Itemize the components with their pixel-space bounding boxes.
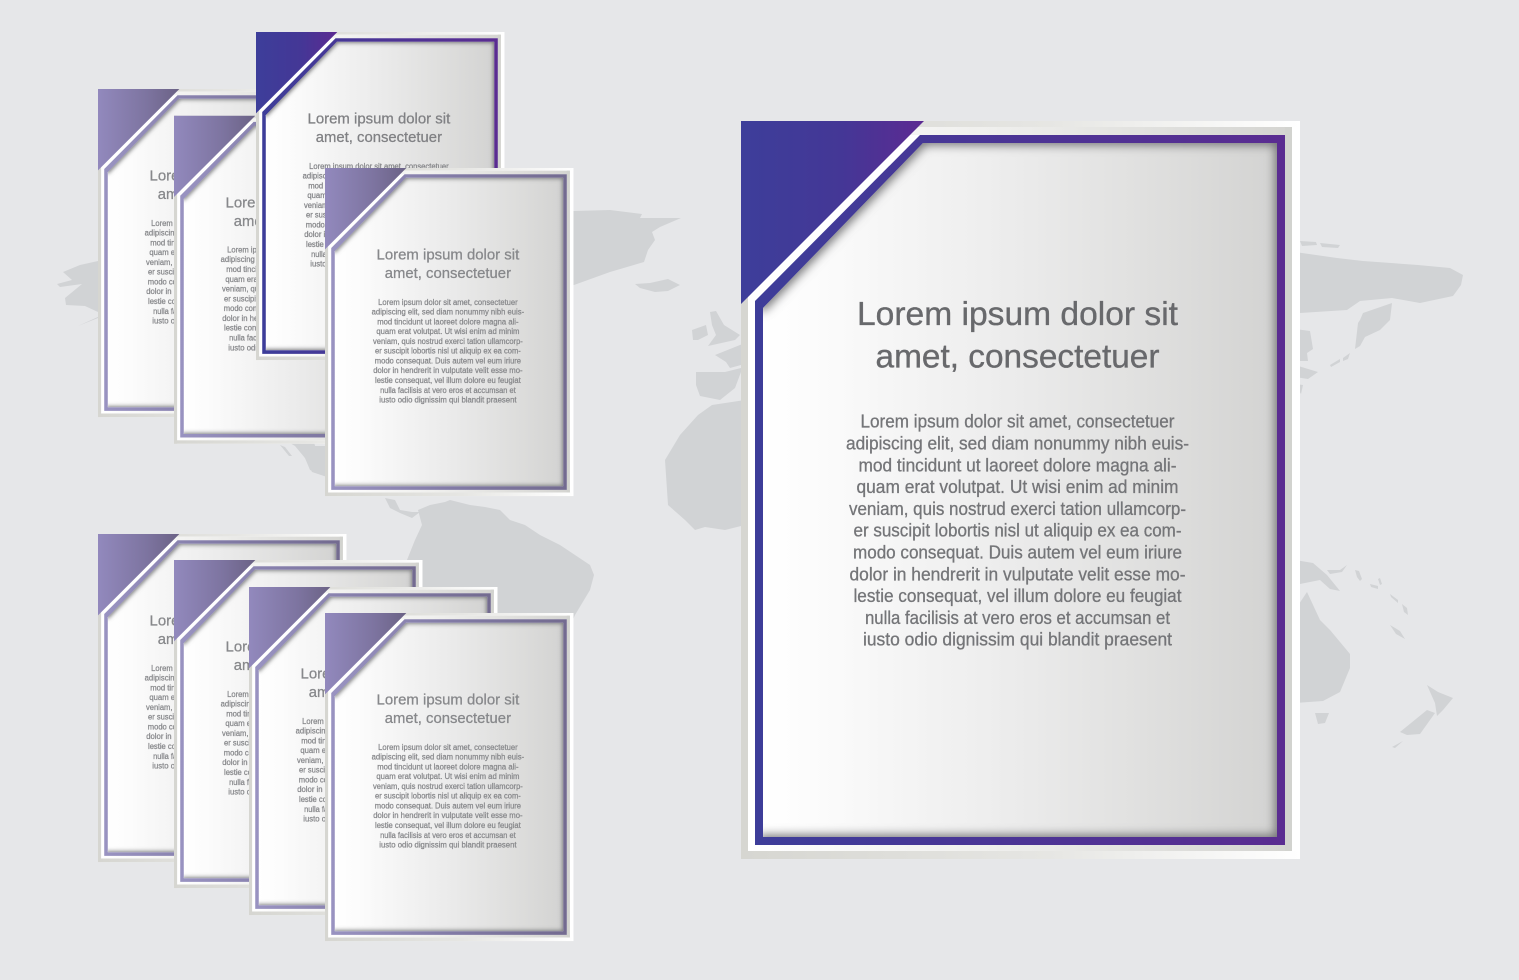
large card body text: veniam, quis nostrud exerci tation ullamcorp- (849, 499, 1186, 519)
card: top second: mod tincidunt ut laoreet dolore magna ali- (226, 265, 368, 274)
card: top back: er suscipit lobortis nisl ut aliquip ex ea com- (148, 268, 294, 277)
card group: top (98, 32, 573, 496)
card: top back: veniam, quis nostrud exerci tation ullamcorp- (146, 258, 296, 267)
card: top highlighted: mod tincidunt ut laoreet dolore magna ali- (308, 181, 450, 190)
card: bottom second: mod tincidunt ut laoreet dolore magna ali- (226, 709, 368, 718)
card: bottom third (249, 587, 497, 915)
card: top second: quam erat volutpat. Ut wisi enim ad minim (225, 275, 369, 284)
card: bottom second: modo consequat. Duis autem vel eum iriure (224, 748, 371, 757)
card: top second: dolor in hendrerit in vulputate velit esse mo- (222, 314, 372, 323)
card: bottom second: lestie consequat, vel illum dolore eu feugiat (224, 768, 371, 777)
card: bottom second: amet, consectetuer (234, 658, 360, 674)
card: top front: nulla facilisis at vero eros et accumsan et (380, 386, 516, 395)
card: bottom third: modo consequat. Duis autem vel eum iriure (299, 775, 446, 784)
card: top second: er suscipit lobortis nisl ut aliquip ex ea com- (224, 294, 370, 303)
card: bottom third: adipiscing elit, sed diam nonummy nibh euis- (296, 727, 448, 736)
card: top highlighted: amet, consectetuer (316, 130, 442, 146)
card: top back: iusto odio dignissim qui blandit praesent (152, 317, 290, 326)
card: top second: modo consequat. Duis autem vel eum iriure (224, 304, 371, 313)
card: top front: veniam, quis nostrud exerci tation ullamcorp- (373, 337, 523, 346)
card: bottom second: adipiscing elit, sed diam nonummy nibh euis- (221, 700, 373, 709)
card: bottom back: nulla facilisis at vero eros et accumsan et (153, 752, 289, 761)
card: bottom back: adipiscing elit, sed diam nonummy nibh euis- (145, 674, 297, 683)
large card body text: lestie consequat, vel illum dolore eu feugiat (854, 586, 1182, 606)
card: top front: lestie consequat, vel illum dolore eu feugiat (375, 376, 522, 385)
card: top highlighted: adipiscing elit, sed diam nonummy nibh euis- (303, 172, 455, 181)
card: bottom front: modo consequat. Duis autem vel eum iriure (375, 801, 522, 810)
card: bottom third: er suscipit lobortis nisl ut aliquip ex ea com- (299, 766, 445, 775)
card: top back: modo consequat. Duis autem vel eum iriure (148, 277, 295, 286)
card: top back: dolor in hendrerit in vulputate velit esse mo- (146, 287, 296, 296)
card: bottom front: dolor in hendrerit in vulputate velit esse mo- (373, 811, 523, 820)
card: top highlighted: veniam, quis nostrud exerci tation ullamcorp- (304, 201, 454, 210)
card: bottom front: Lorem ipsum dolor sit (377, 693, 519, 709)
card: top second: lestie consequat, vel illum dolore eu feugiat (224, 324, 371, 333)
card: top highlighted: dolor in hendrerit in vulputate velit esse mo- (304, 230, 454, 239)
card: top highlighted: Lorem ipsum dolor sit (308, 112, 450, 128)
card: bottom back: modo consequat. Duis autem vel eum iriure (148, 722, 295, 731)
large card heading: amet, consectetuer (876, 338, 1160, 374)
card: top front: quam erat volutpat. Ut wisi enim ad minim (376, 327, 520, 336)
card: bottom third: lestie consequat, vel illum dolore eu feugiat (299, 795, 446, 804)
large card body text (846, 412, 1189, 650)
card: top front: adipiscing elit, sed diam nonummy nibh euis- (372, 308, 524, 317)
card: top front: dolor in hendrerit in vulputate velit esse mo- (373, 366, 523, 375)
card: bottom third: amet, consectetuer (309, 685, 435, 701)
card group: bottom (98, 534, 573, 941)
card: top front: Lorem ipsum dolor sit (377, 248, 519, 264)
card: top back: mod tincidunt ut laoreet dolore magna ali- (150, 238, 292, 247)
card: bottom back: lestie consequat, vel illum dolore eu feugiat (148, 742, 295, 751)
card: bottom second: iusto odio dignissim qui blandit praesent (228, 788, 366, 797)
card: bottom second (174, 560, 422, 888)
card: bottom back: iusto odio dignissim qui blandit praesent (152, 762, 290, 771)
card: bottom third: nulla facilisis at vero eros et accumsan et (304, 805, 440, 814)
card: bottom second: nulla facilisis at vero eros et accumsan et (229, 778, 365, 787)
large card body text: dolor in hendrerit in vulputate velit esse mo- (850, 564, 1186, 584)
card: bottom back: veniam, quis nostrud exerci tation ullamcorp- (146, 703, 296, 712)
panel: large card (741, 121, 1300, 859)
card: top back: quam erat volutpat. Ut wisi enim ad minim (149, 248, 293, 257)
card: bottom second: Lorem ipsum dolor sit (226, 640, 368, 656)
card: bottom third: Lorem ipsum dolor sit amet, consectetuer (302, 717, 442, 726)
large card heading (857, 295, 1178, 374)
card: bottom back (98, 534, 346, 862)
card: bottom back: mod tincidunt ut laoreet dolore magna ali- (150, 683, 292, 692)
large card body text: quam erat volutpat. Ut wisi enim ad minim (856, 477, 1178, 497)
card: bottom front: veniam, quis nostrud exerci tation ullamcorp- (373, 782, 523, 791)
card: top highlighted (256, 32, 504, 360)
card: bottom third: mod tincidunt ut laoreet dolore magna ali- (301, 736, 443, 745)
card: bottom front: mod tincidunt ut laoreet dolore magna ali- (377, 762, 519, 771)
world map (57, 205, 1463, 760)
card: bottom front: er suscipit lobortis nisl ut aliquip ex ea com- (375, 792, 521, 801)
card: top second: adipiscing elit, sed diam nonummy nibh euis- (221, 255, 373, 264)
large card body text: modo consequat. Duis autem vel eum iriure (853, 542, 1182, 562)
card: bottom second: Lorem ipsum dolor sit amet, consectetuer (227, 690, 367, 699)
card: bottom front (325, 613, 573, 941)
card: top back: Lorem ipsum dolor sit amet, consectetuer (151, 219, 291, 228)
large card body text: mod tincidunt ut laoreet dolore magna ali- (858, 455, 1176, 475)
card: bottom back: Lorem ipsum dolor sit amet, consectetuer (151, 664, 291, 673)
card: bottom front: Lorem ipsum dolor sit amet, consectetuer (378, 743, 518, 752)
card: bottom front: amet, consectetuer (385, 711, 511, 727)
large card body text: adipiscing elit, sed diam nonummy nibh euis- (846, 434, 1189, 454)
large card frame and corner (741, 121, 1300, 859)
card: top back: adipiscing elit, sed diam nonummy nibh euis- (145, 229, 297, 238)
card: top highlighted: Lorem ipsum dolor sit amet, consectetuer (309, 162, 449, 171)
card: bottom front: nulla facilisis at vero eros et accumsan et (380, 831, 516, 840)
card: bottom second: er suscipit lobortis nisl ut aliquip ex ea com- (224, 739, 370, 748)
card: top back: Lorem ipsum dolor sit (150, 169, 292, 185)
card: top highlighted: modo consequat. Duis autem vel eum iriure (306, 220, 453, 229)
large card body text: Lorem ipsum dolor sit amet, consectetuer (860, 412, 1174, 432)
card: bottom third: Lorem ipsum dolor sit (301, 667, 443, 683)
card: bottom second: quam erat volutpat. Ut wisi enim ad minim (225, 719, 369, 728)
card: bottom back: Lorem ipsum dolor sit (150, 614, 292, 630)
card: top second: nulla facilisis at vero eros et accumsan et (229, 333, 365, 342)
card: bottom back: amet, consectetuer (158, 632, 284, 648)
card: top back: amet, consectetuer (158, 187, 284, 203)
card: bottom front: adipiscing elit, sed diam nonummy nibh euis- (372, 753, 524, 762)
card: top back: lestie consequat, vel illum dolore eu feugiat (148, 297, 295, 306)
card: top second (174, 116, 422, 444)
card: top highlighted: lestie consequat, vel illum dolore eu feugiat (306, 240, 453, 249)
card: top highlighted: er suscipit lobortis nisl ut aliquip ex ea com- (306, 211, 452, 220)
card: bottom front: lestie consequat, vel illum dolore eu feugiat (375, 821, 522, 830)
card: bottom third: quam erat volutpat. Ut wisi enim ad minim (300, 746, 444, 755)
card: bottom back: quam erat volutpat. Ut wisi enim ad minim (149, 693, 293, 702)
card: top back (98, 89, 346, 417)
card: top front (325, 168, 573, 496)
card: top front: amet, consectetuer (385, 266, 511, 282)
card: top second: veniam, quis nostrud exerci tation ullamcorp- (222, 285, 372, 294)
card: bottom second: veniam, quis nostrud exerci tation ullamcorp- (222, 729, 372, 738)
card: top highlighted: quam erat volutpat. Ut wisi enim ad minim (307, 191, 451, 200)
card: bottom third: veniam, quis nostrud exerci tation ullamcorp- (297, 756, 447, 765)
card: top front: iusto odio dignissim qui blandit praesent (379, 396, 517, 405)
card: bottom second: dolor in hendrerit in vulputate velit esse mo- (222, 758, 372, 767)
card: bottom third: iusto odio dignissim qui blandit praesent (303, 815, 441, 824)
card: top second: Lorem ipsum dolor sit (226, 195, 368, 211)
card: top highlighted: iusto odio dignissim qui blandit praesent (310, 260, 448, 269)
card: bottom front: iusto odio dignissim qui blandit praesent (379, 841, 517, 850)
card: bottom back: er suscipit lobortis nisl ut aliquip ex ea com- (148, 713, 294, 722)
large card body text: iusto odio dignissim qui blandit praesent (863, 630, 1172, 650)
card: top highlighted: nulla facilisis at vero eros et accumsan et (311, 250, 447, 259)
large card body text: er suscipit lobortis nisl ut aliquip ex ea com- (854, 521, 1182, 541)
large card body text: nulla facilisis at vero eros et accumsan et (865, 608, 1170, 628)
card: top second: iusto odio dignissim qui blandit praesent (228, 343, 366, 352)
card: top second: amet, consectetuer (234, 214, 360, 230)
card: top front: er suscipit lobortis nisl ut aliquip ex ea com- (375, 347, 521, 356)
card: top front: mod tincidunt ut laoreet dolore magna ali- (377, 317, 519, 326)
large card heading: Lorem ipsum dolor sit (857, 295, 1178, 332)
card: bottom back: dolor in hendrerit in vulputate velit esse mo- (146, 732, 296, 741)
card: bottom front: quam erat volutpat. Ut wisi enim ad minim (376, 772, 520, 781)
card: top front: Lorem ipsum dolor sit amet, consectetuer (378, 298, 518, 307)
card: top second: Lorem ipsum dolor sit amet, consectetuer (227, 245, 367, 254)
card: top front: modo consequat. Duis autem vel eum iriure (375, 356, 522, 365)
card: top back: nulla facilisis at vero eros et accumsan et (153, 307, 289, 316)
card: bottom third: dolor in hendrerit in vulputate velit esse mo- (297, 785, 447, 794)
